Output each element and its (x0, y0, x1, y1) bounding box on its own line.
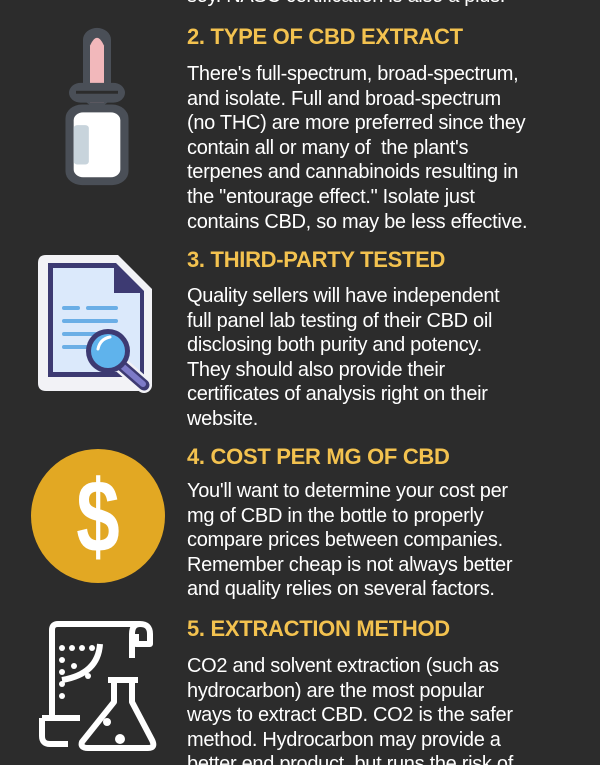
text: section 3 body: disclosing both purity and potency. (187, 334, 482, 356)
text: section 4 body (187, 480, 512, 600)
text: section 3 body: certificates of analysis right on their (187, 383, 488, 405)
text: section 4 body: Remember cheap is not always better (187, 554, 512, 576)
text: section 4 body: mg of CBD in the bottle to properly (187, 505, 483, 527)
text: section 2 body: contain all or many of the plant's (187, 137, 468, 159)
text: section 2 body: There's full-spectrum, broad-spectrum, (187, 63, 518, 85)
icon: scroll and flask (39, 621, 156, 751)
text: section 3 body: website. (187, 408, 258, 430)
text: section 3 body: They should also provide their (187, 359, 445, 381)
text: section 5 body: hydrocarbon) are the most popular (187, 680, 484, 702)
text: section 2 body: terpenes and cannabinoids resulting in (187, 161, 518, 183)
text: section 5 body: CO2 and solvent extraction (such as (187, 655, 499, 677)
text: section 4 body: and quality relies on several factors. (187, 578, 495, 600)
text: section 3 body: full panel lab testing of their CBD oil (187, 310, 492, 332)
text: section 3 body: Quality sellers will have independent (187, 285, 499, 307)
heading: section 2: 2. TYPE OF CBD EXTRACT (187, 24, 463, 49)
text: section 3 body (187, 285, 500, 430)
text: section 2 body: (no THC) are more preferred since they (187, 112, 525, 134)
text: section 2 body: the "entourage effect." Isolate just (187, 186, 475, 208)
icon: dropper bottle (66, 28, 128, 186)
text: section 4 body: You'll want to determine your cost per (187, 480, 508, 502)
heading: section 3: 3. THIRD-PARTY TESTED (187, 247, 445, 272)
text: section 2 body: and isolate. Full and broad-spectrum (187, 88, 501, 110)
icon: document with magnifier (38, 255, 152, 393)
text: section 2 body (187, 63, 527, 233)
heading: section 4: 4. COST PER MG OF CBD (187, 444, 450, 469)
icon: dollar coin (31, 449, 165, 583)
text: section 5 body (187, 655, 514, 765)
text: section 4 body: compare prices between companies. (187, 529, 503, 551)
heading: section 5: 5. EXTRACTION METHOD (187, 616, 450, 641)
icon: dollar coin: $ (76, 459, 120, 574)
text: section 5 body: ways to extract CBD. CO2 is the safer (187, 704, 513, 726)
text: section 5 body: method. Hydrocarbon may provide a (187, 729, 501, 751)
text: section 2 body: contains CBD, so may be less effective. (187, 211, 527, 233)
